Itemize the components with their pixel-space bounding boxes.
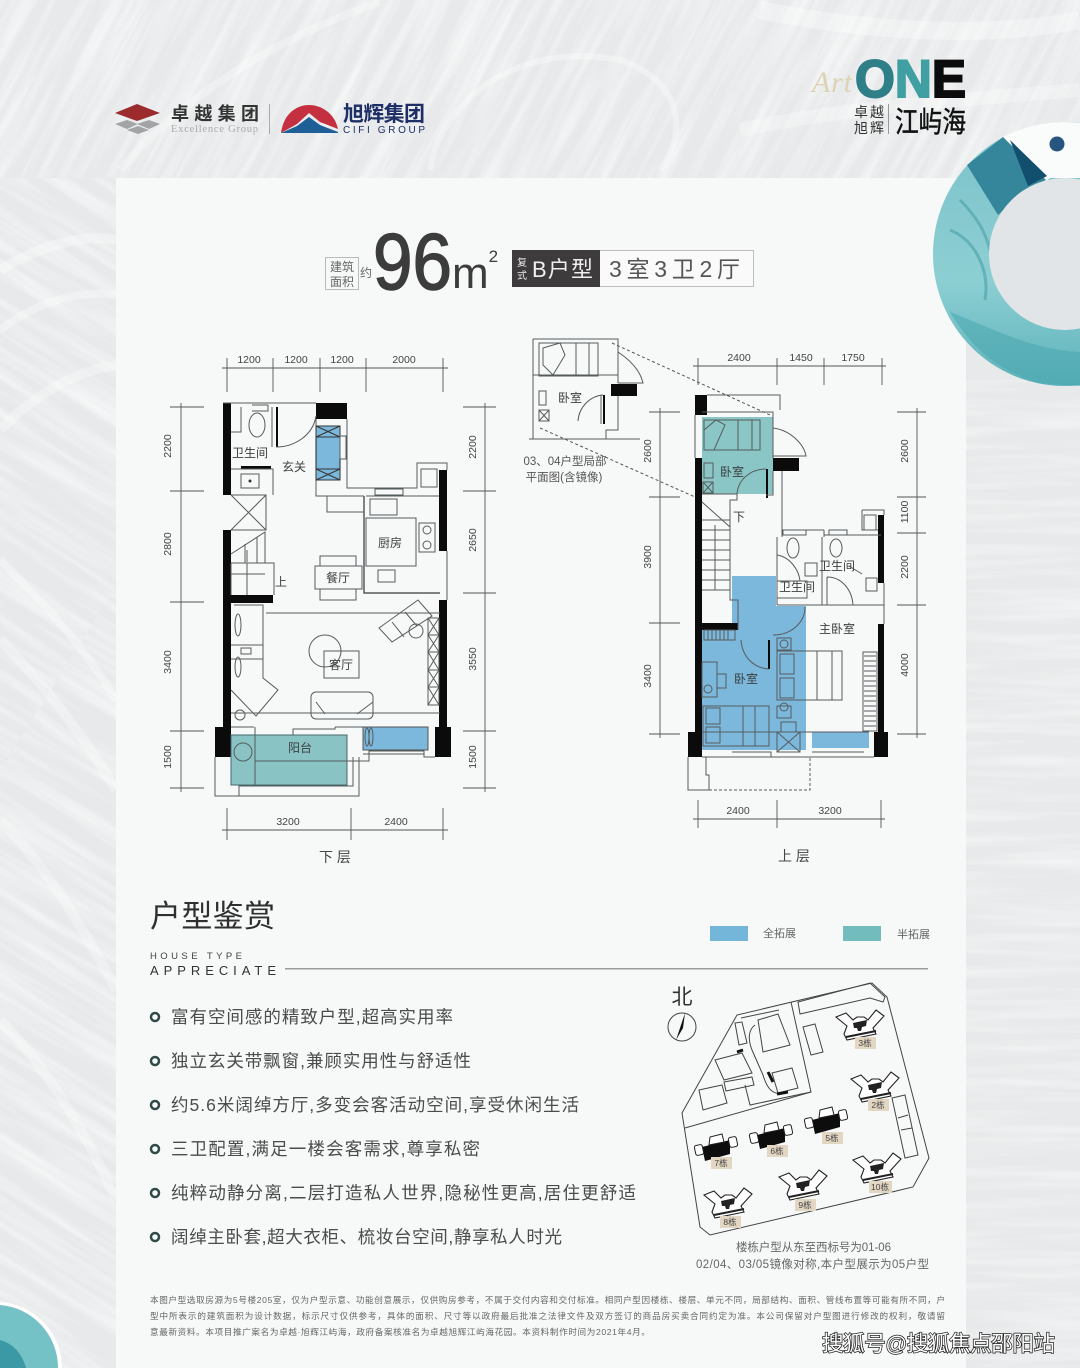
badge: duplex B type: B户型 (532, 257, 593, 282)
walls: upper floor (688, 395, 888, 790)
room labels: lower floor: 餐厅 (326, 570, 350, 585)
floor plan: upper floor (642, 352, 926, 864)
dimensions: upper floor: 1450 (789, 352, 813, 364)
site note: 02/04、03/05镜像对称,本户型展示为05户型 (696, 1257, 929, 1271)
caption: upper floor: 上 层 (778, 848, 810, 864)
building labels: 7栋 (714, 1158, 728, 1168)
caption: inset (523, 454, 607, 484)
badge: duplex B type: 式 (517, 269, 527, 282)
heading: house type appreciate: HOUSE TYPE (150, 951, 242, 962)
dimensions: upper floor: 2400 (726, 805, 750, 817)
legend: extension types: 半拓展 (897, 927, 930, 941)
site outline (682, 983, 929, 1235)
dimensions: lower floor: 1200 (237, 354, 261, 366)
room labels: upper floor: 下 (733, 510, 745, 524)
room labels: lower floor: 客厅 (329, 657, 353, 672)
graphic: teal ring top right (933, 122, 1080, 386)
site note: 楼栋户型从东至西标号为01-06 (736, 1240, 891, 1254)
dimensions: lower floor: 1200 (330, 354, 354, 366)
heading: house type appreciate: APPRECIATE (150, 963, 276, 978)
dimensions: upper floor: 3900 (642, 545, 654, 569)
building labels: 10栋 (871, 1182, 889, 1192)
compass (668, 986, 696, 1041)
dimensions: lower floor: 1500 (467, 745, 479, 769)
panel: content sheet (116, 178, 966, 1368)
dimensions: lower floor: 2000 (392, 354, 416, 366)
dimensions: lower floor: 2650 (467, 528, 479, 552)
icon: navy dot (1050, 136, 1064, 152)
dimensions: lower floor: 3550 (467, 647, 479, 671)
site plan (668, 983, 929, 1271)
feature 5: 纯粹动静分离,二层打造私人世界,隐秘性更高,居住更舒适 (171, 1183, 636, 1203)
logo: CIFI Group: 旭辉集团 (343, 103, 425, 126)
label: built area (326, 258, 372, 290)
bay window: full extension (363, 727, 435, 757)
dimensions: upper floor: 4000 (899, 653, 911, 677)
logo: CIFI Group: CIFI GROUP (343, 125, 425, 136)
compass: 北 (672, 986, 692, 1009)
caption: inset: 03、04户型局部 (523, 454, 607, 468)
caption: inset: 平面图(含镜像) (526, 470, 602, 484)
dimensions: upper floor: 2200 (899, 555, 911, 579)
stairs: upper floor (702, 502, 730, 600)
fixture: sink (241, 474, 259, 488)
disclaimer (150, 1294, 945, 1337)
room labels: upper floor (720, 464, 855, 686)
dimensions: lower floor: 1200 (284, 354, 308, 366)
room labels: lower floor (232, 446, 402, 755)
logo: Excellence Group: 卓越集团 (171, 104, 259, 124)
number: 96: 96 (373, 217, 452, 306)
logo: Excellence Group (115, 104, 259, 135)
dimensions: upper floor (642, 352, 926, 828)
badge: duplex B type: 3室3卫2厅 (609, 256, 740, 282)
list: features (151, 1007, 636, 1247)
furniture: upper floor (702, 420, 877, 757)
building labels: 2栋 (871, 1100, 885, 1110)
floor plan: lower floor (162, 354, 496, 865)
logo: Art ONE 江屿海: ONE (855, 50, 966, 109)
dimensions: upper floor: 1750 (841, 352, 865, 364)
inset: 03 04 partial plan: 卧室 (558, 390, 582, 405)
building labels (711, 1037, 892, 1228)
heading: area and unit type (326, 217, 754, 306)
feature 3: 约5.6米阔绰方厅,多变会客活动空间,享受休闲生活 (171, 1095, 579, 1115)
caption: lower floor: 下 层 (319, 849, 351, 865)
inset: 03 04 partial plan (523, 339, 770, 497)
feature 6: 阔绰主卧套,超大衣柜、梳妆台空间,静享私人时光 (171, 1227, 562, 1247)
dimensions: upper floor: 2600 (899, 439, 911, 463)
living room furniture (231, 600, 440, 720)
room labels: upper floor: 卫生间 (819, 559, 855, 573)
dimensions: lower floor: 3400 (162, 650, 174, 674)
label: built area: 约 (360, 265, 372, 280)
door: entrance (276, 416, 316, 447)
unit: square metres: m (452, 249, 489, 298)
kitchen (364, 469, 440, 593)
divider logo (269, 104, 270, 134)
legend: extension types: 全拓展 (763, 926, 796, 940)
logo: Excellence Group: Excellence Group (171, 124, 258, 135)
logo: Art ONE 江屿海 (810, 50, 966, 139)
dimensions: lower floor: 3200 (276, 816, 300, 828)
room labels: upper floor: 卫生间 (779, 580, 815, 594)
dimensions: lower floor: 2400 (384, 816, 408, 828)
dining table (315, 556, 362, 600)
doors: upper floor (737, 428, 806, 669)
icon: CIFI mountain (281, 105, 338, 133)
disclaimer: 型中所表示的建筑面积为设计数据，标示尺寸仅供参考，具体的面积、尺寸等以政府最后批准之法律文件及双方签订的商品房买卖合同约定为准。本公司保留对户型图进行修改的权利，敬请留 (150, 1310, 945, 1321)
room labels: upper floor: 卧室 (734, 671, 758, 686)
dimensions: lower floor: 2200 (467, 435, 479, 459)
dimensions: lower floor: 1500 (162, 745, 174, 769)
feature 2: 独立玄关带飘窗,兼顾实用性与舒适性 (171, 1051, 471, 1071)
building labels: 8栋 (723, 1217, 737, 1227)
unit: square metres: 2 (489, 247, 498, 266)
extension fills: upper floor (702, 417, 869, 750)
disclaimer: 意最新资料。本项目推广案名为卓越·旭辉江屿海，政府备案核准名为卓越旭辉江屿海花园。本资料制作时间为2021年4月。 (150, 1326, 650, 1337)
room labels: lower floor: 阳台 (288, 740, 312, 755)
logo: Art ONE 江屿海: 旭辉 (854, 120, 884, 136)
fixture: toilet (249, 413, 265, 437)
logo: CIFI Group (281, 103, 425, 136)
label: built area: 面积 (330, 275, 354, 289)
site note (696, 1240, 929, 1271)
dimensions: upper floor: 3200 (818, 805, 842, 817)
stairs: lower floor (231, 532, 287, 595)
logo: Art ONE 江屿海: Art (810, 66, 853, 99)
building labels: 6栋 (770, 1146, 784, 1156)
dimensions: upper floor: 1100 (899, 501, 911, 523)
feature 1: 富有空间感的精致户型,超高实用率 (171, 1007, 453, 1027)
graphic: teal corner bottom left (0, 1302, 62, 1368)
building labels: 3栋 (858, 1038, 872, 1048)
dimensions: upper floor: 2600 (642, 439, 654, 463)
dimensions: lower floor (162, 354, 496, 840)
heading: house type appreciate: 户型鉴赏 (150, 899, 275, 934)
watermark: 搜狐号@搜狐焦点邵阳站 (822, 1332, 1055, 1356)
dimensions: upper floor: 3400 (642, 664, 654, 688)
dimensions: lower floor: 2800 (162, 532, 174, 556)
heading: house type appreciate (150, 899, 928, 978)
walls: lower floor (215, 403, 451, 757)
room labels: upper floor: 卧室 (720, 464, 744, 479)
logo: Art ONE 江屿海: 江屿海 (895, 106, 966, 139)
feature 4: 三卫配置,满足一楼会客需求,尊享私密 (171, 1139, 480, 1159)
room labels: upper floor: 主卧室 (819, 621, 855, 636)
room labels: lower floor: 卫生间 (232, 446, 268, 460)
logo: Art ONE 江屿海: 卓越 (854, 104, 884, 120)
site roads and facilities (685, 983, 918, 1158)
stairs: lower floor: 上 (275, 575, 287, 589)
label: built area: 建筑 (330, 259, 354, 274)
dimensions: upper floor: 2400 (727, 352, 751, 364)
disclaimer: 本图户型选取房源为5号楼205室，仅为户型示意、功能创意展示，仅供购房参考，不属于交付内容和交付标准。相同户型因楼栋、楼层、单元不同，局部结构、面积、管线布置等可能有所不同，户 (150, 1294, 945, 1305)
legend: extension types (710, 926, 930, 941)
badge: duplex B type: 复 (517, 256, 527, 269)
buildings: towers (694, 1010, 901, 1218)
badge: duplex B type (512, 250, 754, 287)
building labels: 9栋 (798, 1200, 812, 1210)
building labels: 5栋 (825, 1133, 839, 1143)
icon: red diamond (115, 104, 160, 134)
room labels: lower floor: 厨房 (378, 535, 402, 550)
room labels: lower floor: 玄关 (282, 459, 306, 474)
balcony: half extension (215, 727, 369, 796)
cabinet: entry bay window (316, 426, 346, 480)
dimensions: lower floor: 2200 (162, 434, 174, 458)
